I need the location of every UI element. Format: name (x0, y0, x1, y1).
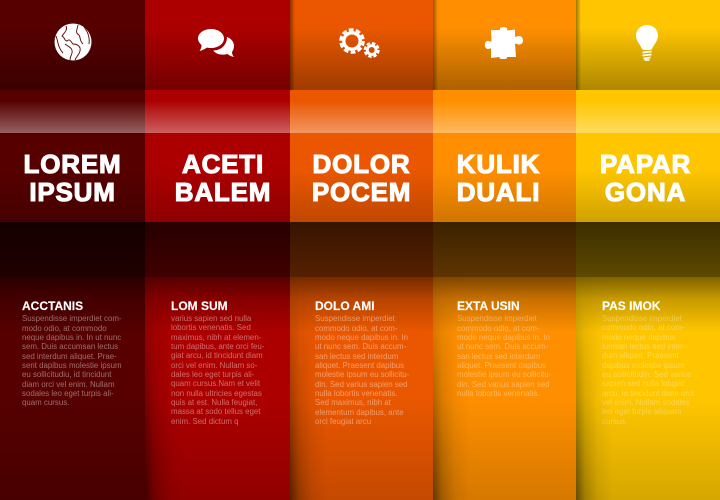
body text: aliquet. Praesent dapibus (315, 361, 404, 370)
body text: din. Sed varius sapien sed (457, 380, 550, 389)
body text: commodo odio, at com- (315, 324, 397, 333)
heading: DUALI (457, 177, 540, 207)
heading (175, 149, 271, 207)
body text: quam cursus. (22, 398, 69, 407)
body text: modo neque dapibus in. In (457, 333, 550, 342)
body text: eu sollicitudiu, id tincidunt (22, 370, 111, 379)
body text: sapien sed nulla lobgiat (602, 379, 684, 388)
body text: modo neque dapibus (602, 333, 676, 342)
body text: tum dapibus, ante orci feu- (171, 342, 264, 351)
heading: DOLOR (313, 149, 410, 179)
body text: Suspendisse imperdiet (602, 314, 682, 323)
body text: lobortis venenatis. Sed (171, 323, 251, 332)
heading: GONA (605, 177, 686, 207)
body text: varius sapien sed nulla (171, 314, 251, 323)
panel: column 4 kulik duali (433, 0, 576, 500)
panel: column 1 lorem ipsum (0, 0, 145, 500)
body text: Sed maximus, nibh at (315, 398, 391, 407)
body text: Suspendisse imperdiet (457, 314, 537, 323)
body text: commodo odio, at com- (602, 323, 684, 332)
body text: iumsan lectus sed inter- (602, 342, 685, 351)
body text: sodales leo eget turpis ali- (22, 389, 114, 398)
heading: PAPAR (600, 149, 691, 179)
icon: speech bubbles (198, 29, 234, 57)
panel: column 5 papar gona (576, 0, 720, 500)
body text: modo neque dapibus in. In (315, 333, 408, 342)
body text: quis at est. Nulla feugiat, (171, 398, 257, 407)
body text: maximus, nibh at elemen- (171, 333, 261, 342)
heading: LOREM (24, 149, 121, 179)
icon: light bulb (636, 25, 658, 61)
body text (171, 314, 264, 426)
body text: din. Sed varius sapien sed (315, 380, 408, 389)
heading (312, 149, 411, 207)
body text: molestie ipsum eu sollicitu- (315, 370, 409, 379)
body text: enim. Sed dictum q (171, 417, 239, 426)
heading (457, 149, 540, 207)
heading: KULIK (457, 149, 540, 179)
body text: giat arcu, id tincidunt diam (171, 351, 263, 360)
body text: cursus. (602, 417, 627, 426)
body text: san lectus sed interdum (457, 352, 540, 361)
body text: eu sollicitudin. Sed varius (602, 370, 691, 379)
body text: neque dapibus in. In ut nunc (22, 333, 121, 342)
body text: ut nunc sem. Duis accum- (457, 342, 548, 351)
body text: Suspendisse imperdiet (315, 314, 395, 323)
body text: molestie ipsum eu sollicitu- (457, 370, 551, 379)
heading: BALEM (175, 177, 271, 207)
body text: orci vel enim. Nullam so- (171, 361, 257, 370)
body text (602, 314, 694, 426)
body text: arcu, id tincidunt diam orci (602, 389, 694, 398)
subheading: PAS IMOK (602, 299, 660, 313)
icon: gears (339, 28, 380, 58)
body text: modo odio, at commodo (22, 324, 107, 333)
body text: san lectus sed interdum (315, 352, 398, 361)
heading (24, 149, 121, 207)
body text: orci feugiat arcu (315, 417, 371, 426)
body text: non nulla ultricies egestas (171, 389, 262, 398)
panel: column 2 aceti balem (145, 0, 290, 500)
body text: commodo odio, at com- (457, 324, 539, 333)
heading: POCEM (312, 177, 411, 207)
body text: ut nunc sem. Duis accum- (315, 342, 406, 351)
body text: sed interdum aliquet. Prae- (22, 352, 117, 361)
body text: massa at sodo tellus eget (171, 407, 260, 416)
body text: elementum dapibus, ante (315, 408, 404, 417)
body text: dum aliquet. Praesent (602, 351, 679, 360)
body text: sent dapibus molestie ipsum (22, 361, 122, 370)
body text (457, 314, 551, 398)
body text: quam cursus.Nam et velit (171, 379, 260, 388)
body text: vel enim. Nullam sodales (602, 398, 690, 407)
body text: diam orci vel enim. Nullam (22, 380, 115, 389)
icon: puzzle piece (484, 27, 523, 59)
heading: ACETI (182, 149, 264, 179)
subheading: ACCTANIS (22, 299, 83, 313)
body text: Suspendisse imperdiet com- (22, 314, 122, 323)
heading: IPSUM (29, 177, 116, 207)
panel: column 3 dolor pocem (290, 0, 433, 500)
body text: sem. Duis accumsan lectus (22, 342, 118, 351)
icon: globe (54, 24, 92, 60)
subheading: DOLO AMI (315, 299, 375, 313)
heading (600, 149, 691, 207)
body text (22, 314, 122, 407)
body text: nulla lobortis venenatis. (315, 389, 397, 398)
body text: dapibus molestie ipsum (602, 361, 684, 370)
body text: dales leo eget turpis ali- (171, 370, 254, 379)
subheading: LOM SUM (171, 299, 228, 313)
body text (315, 314, 409, 426)
body text: aliquet. Praesent dapibus (457, 361, 546, 370)
body text: leo eget turpis aliquam (602, 407, 681, 416)
body text: nulla lobortis venenatis. (457, 389, 539, 398)
subheading: EXTA USIN (457, 299, 520, 313)
